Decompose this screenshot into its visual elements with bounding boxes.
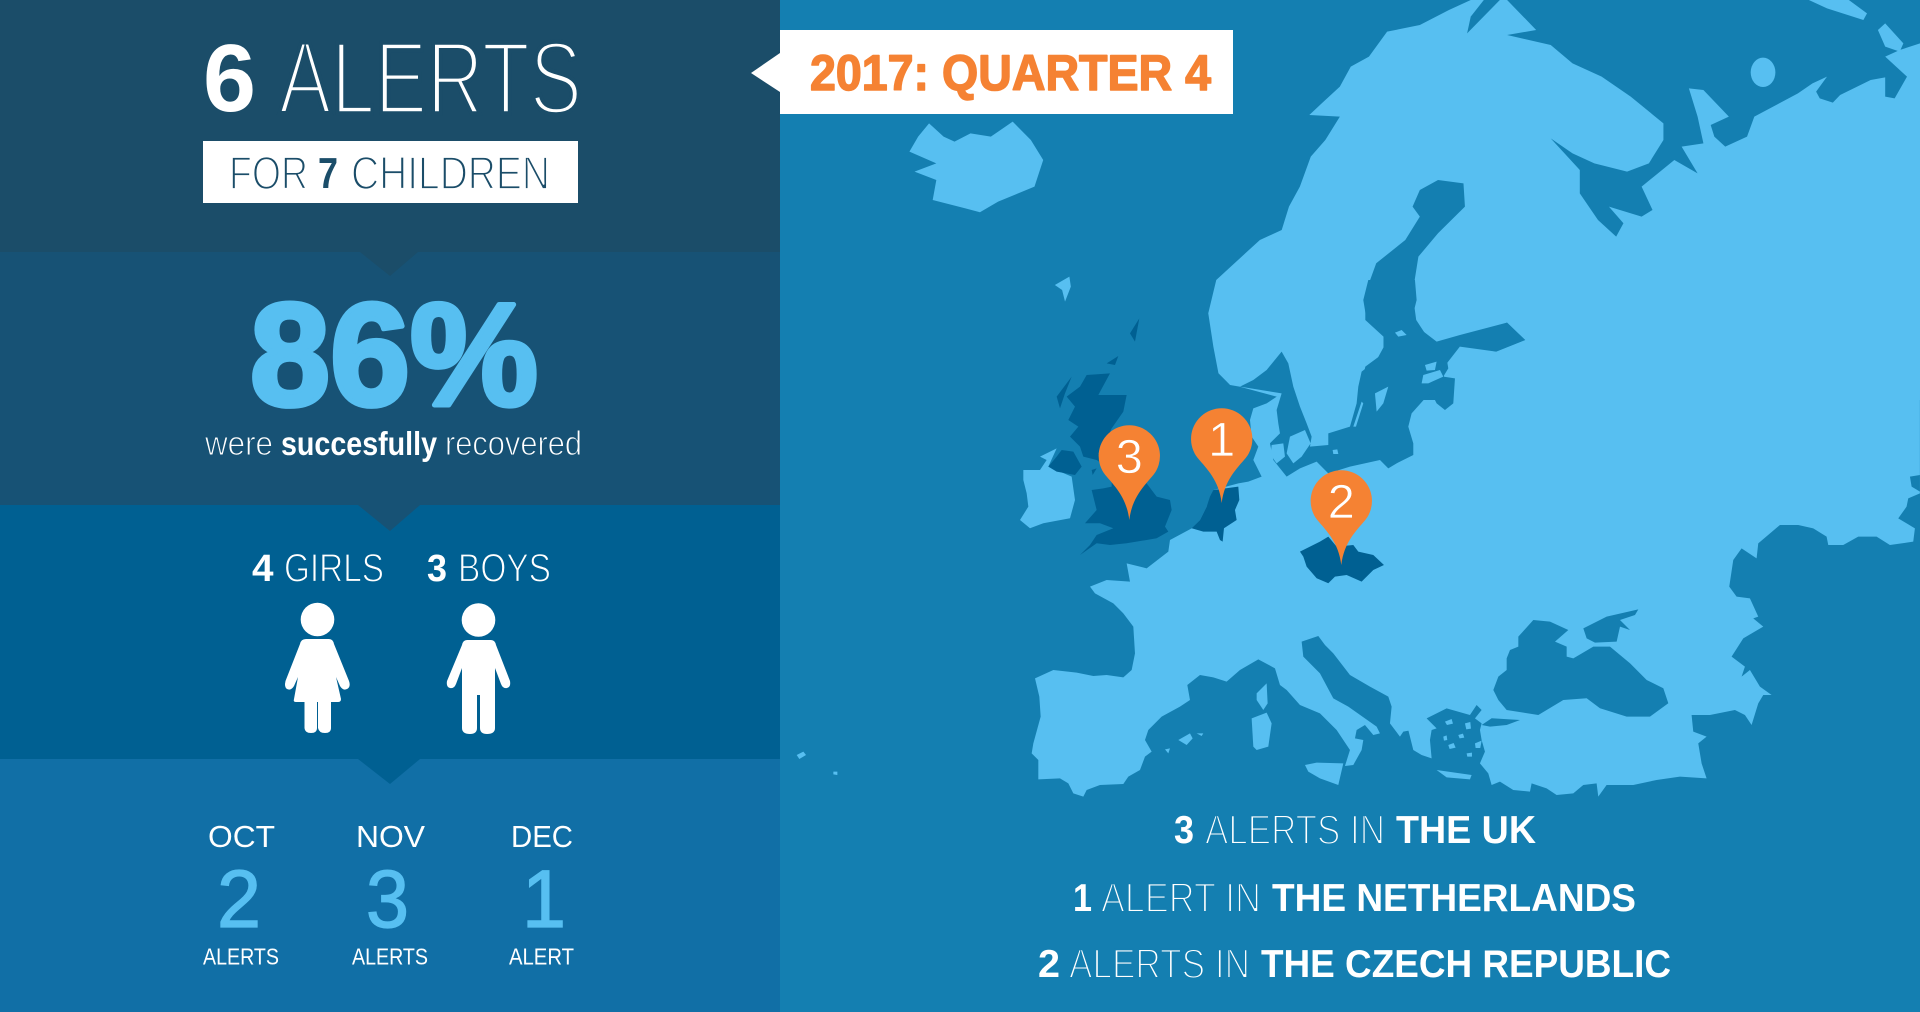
country: Czech Republic <box>1300 537 1384 583</box>
column: October <box>203 819 279 970</box>
Baltic Sea, Kattegat and Skagerrak <box>1240 280 1525 477</box>
column: October: ALERTS <box>203 944 279 970</box>
pin 1: Netherlands: 1 <box>1208 413 1235 467</box>
pin 3: UK: 3 <box>1116 430 1143 484</box>
column: December: ALERT <box>509 944 574 970</box>
arrow: recovery band pointer <box>358 505 420 531</box>
label: 3 boys: BOYS <box>458 547 551 591</box>
line: UK: THE UK <box>1396 809 1536 852</box>
column: October: OCT <box>208 819 275 854</box>
arrow: summary band pointer <box>360 252 418 276</box>
continental Europe land <box>797 390 1920 797</box>
callout: 2017 quarter 4: 2017: QUARTER 4 <box>810 45 1211 101</box>
icon: boy <box>447 603 510 734</box>
column: October: 2 <box>217 854 261 945</box>
country: United Kingdom <box>1048 318 1172 555</box>
caption: were successfully recovered: recovered <box>445 425 582 463</box>
country: Ireland <box>1020 448 1075 528</box>
column: November: 3 <box>366 854 409 945</box>
stat: 86%: 86% <box>250 273 538 436</box>
caption: were successfully recovered: were <box>204 425 273 463</box>
heading: 6 alerts: 6 <box>203 25 256 132</box>
label: 4 girls: GIRLS <box>284 547 384 591</box>
northern land and islands <box>909 0 1920 400</box>
panel: summary band <box>0 0 780 252</box>
label: 4 girls <box>252 547 384 591</box>
column: November: ALERTS <box>352 944 428 970</box>
panel: sixth band months <box>0 759 780 1012</box>
column: December: DEC <box>511 819 573 854</box>
pin 2: Czech Republic: 2 <box>1328 475 1355 529</box>
column: December <box>509 819 574 970</box>
line: Netherlands: THE NETHERLANDS <box>1272 877 1636 920</box>
line: Netherlands <box>1073 874 1636 921</box>
line: UK <box>1174 806 1536 853</box>
column: November <box>352 819 428 970</box>
pin 2: Czech Republic <box>1311 470 1372 565</box>
heading: 6 alerts <box>203 20 582 136</box>
panel: recovery band <box>0 252 780 505</box>
icon: girl <box>285 603 350 733</box>
arrow: children band pointer <box>358 759 420 784</box>
line: Netherlands: 1 <box>1073 877 1092 920</box>
subheading: for 7 children: 7 <box>318 149 338 198</box>
subheading: for 7 children: CHILDREN <box>351 147 550 199</box>
column: November: NOV <box>356 819 425 854</box>
heading: 6 alerts: ALERTS <box>279 20 582 136</box>
line: Netherlands: ALERT IN <box>1101 874 1261 921</box>
subheading: for 7 children: FOR <box>229 147 308 199</box>
caption: were successfully recovered: succesfully <box>281 425 438 462</box>
line: Czech Republic: 2 <box>1038 943 1060 986</box>
line: Czech Republic: THE CZECH REPUBLIC <box>1261 943 1671 986</box>
label: 3 boys: 3 <box>427 548 447 590</box>
line: UK: 3 <box>1174 809 1194 852</box>
line: Czech Republic <box>1038 940 1671 987</box>
panel: alerts by country <box>1038 806 1671 987</box>
line: Czech Republic: ALERTS IN <box>1069 940 1250 987</box>
Black Sea, Azov, Marmara <box>1482 475 1920 727</box>
line: UK: ALERTS IN <box>1205 806 1385 853</box>
column: December: 1 <box>522 854 566 945</box>
pin 1: Netherlands <box>1191 408 1252 503</box>
map of Europe <box>797 0 1920 797</box>
panel: children band <box>0 505 780 759</box>
label: 4 girls: 4 <box>252 548 274 590</box>
label: 3 boys <box>427 547 551 591</box>
Gulf of Bothnia <box>1358 0 1525 400</box>
callout: 2017 quarter 4 <box>751 30 1233 114</box>
subheading: for 7 children <box>203 141 578 203</box>
caption: were successfully recovered <box>204 425 582 463</box>
panel: map background <box>780 0 1920 1012</box>
country: Netherlands <box>1192 487 1239 542</box>
pin 3: UK <box>1099 425 1160 520</box>
